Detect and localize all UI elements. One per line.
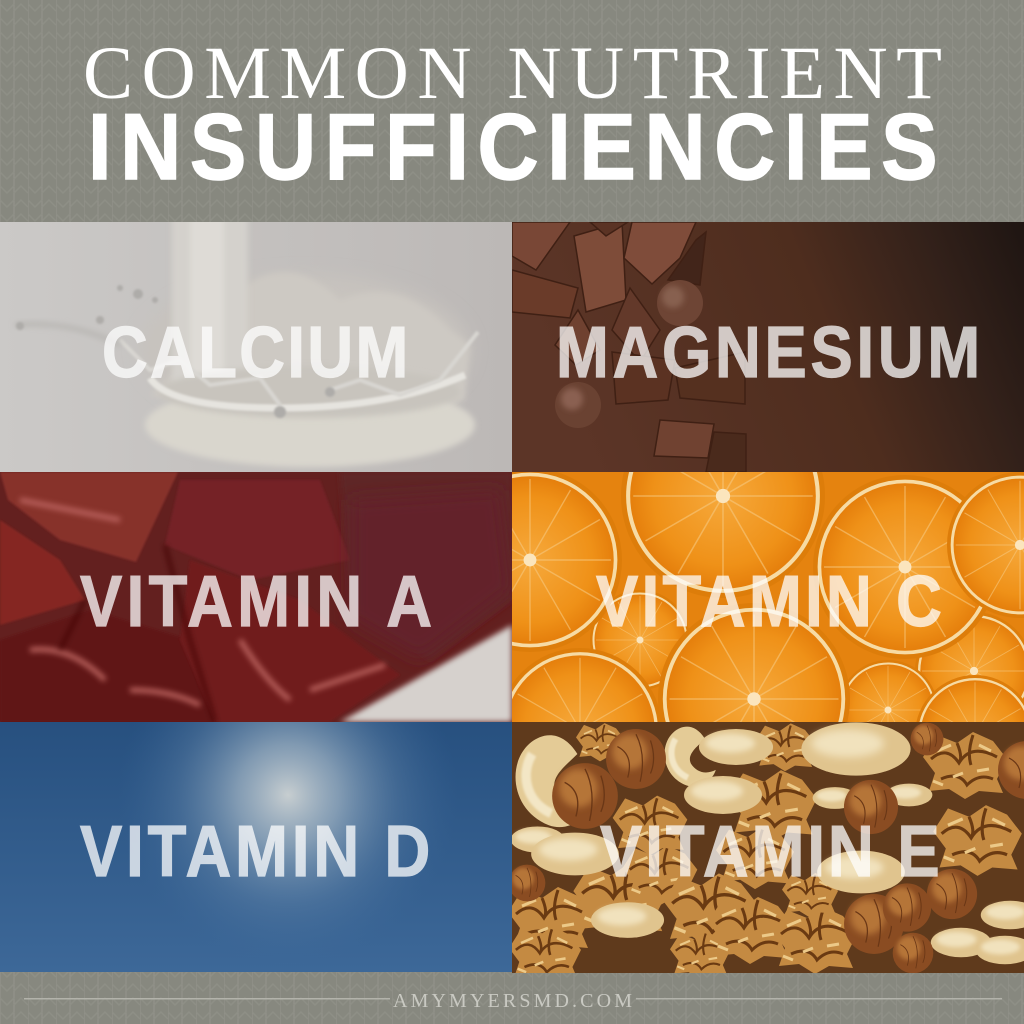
panel: calcium xyxy=(0,215,512,472)
label: calcium: CALCIUM xyxy=(102,313,408,393)
panel: vitamin c xyxy=(512,472,1024,722)
label: vitamin c: VITAMIN C xyxy=(596,562,942,642)
label: vitamin d: VITAMIN D xyxy=(80,812,430,892)
label: vitamin e: VITAMIN E xyxy=(600,812,940,892)
chocolate pieces photo xyxy=(512,222,746,472)
label: vitamin a: VITAMIN A xyxy=(80,562,432,642)
title xyxy=(83,32,942,199)
footer rule left xyxy=(24,998,390,1000)
footer rule right xyxy=(636,998,1002,1000)
sun glow xyxy=(154,722,423,924)
header background panel xyxy=(0,0,1024,222)
footer website: AMYMYERSMD.COM xyxy=(393,990,632,1012)
mixed nuts photo xyxy=(508,722,1024,984)
footer background panel xyxy=(0,972,1024,1024)
panel: vitamin e xyxy=(508,722,1024,984)
label: magnesium: MAGNESIUM xyxy=(556,313,980,393)
panel: vitamin a xyxy=(0,472,512,722)
panel: vitamin d xyxy=(0,722,512,972)
liver photo xyxy=(0,472,512,722)
orange slices photo xyxy=(438,394,1024,812)
panel: magnesium xyxy=(512,222,1024,472)
milk pour and splash photo xyxy=(15,215,478,467)
title line: insufficiencies: INSUFFICIENCIES xyxy=(88,94,938,199)
title line: common nutrient: COMMON NUTRIENT xyxy=(83,32,942,115)
